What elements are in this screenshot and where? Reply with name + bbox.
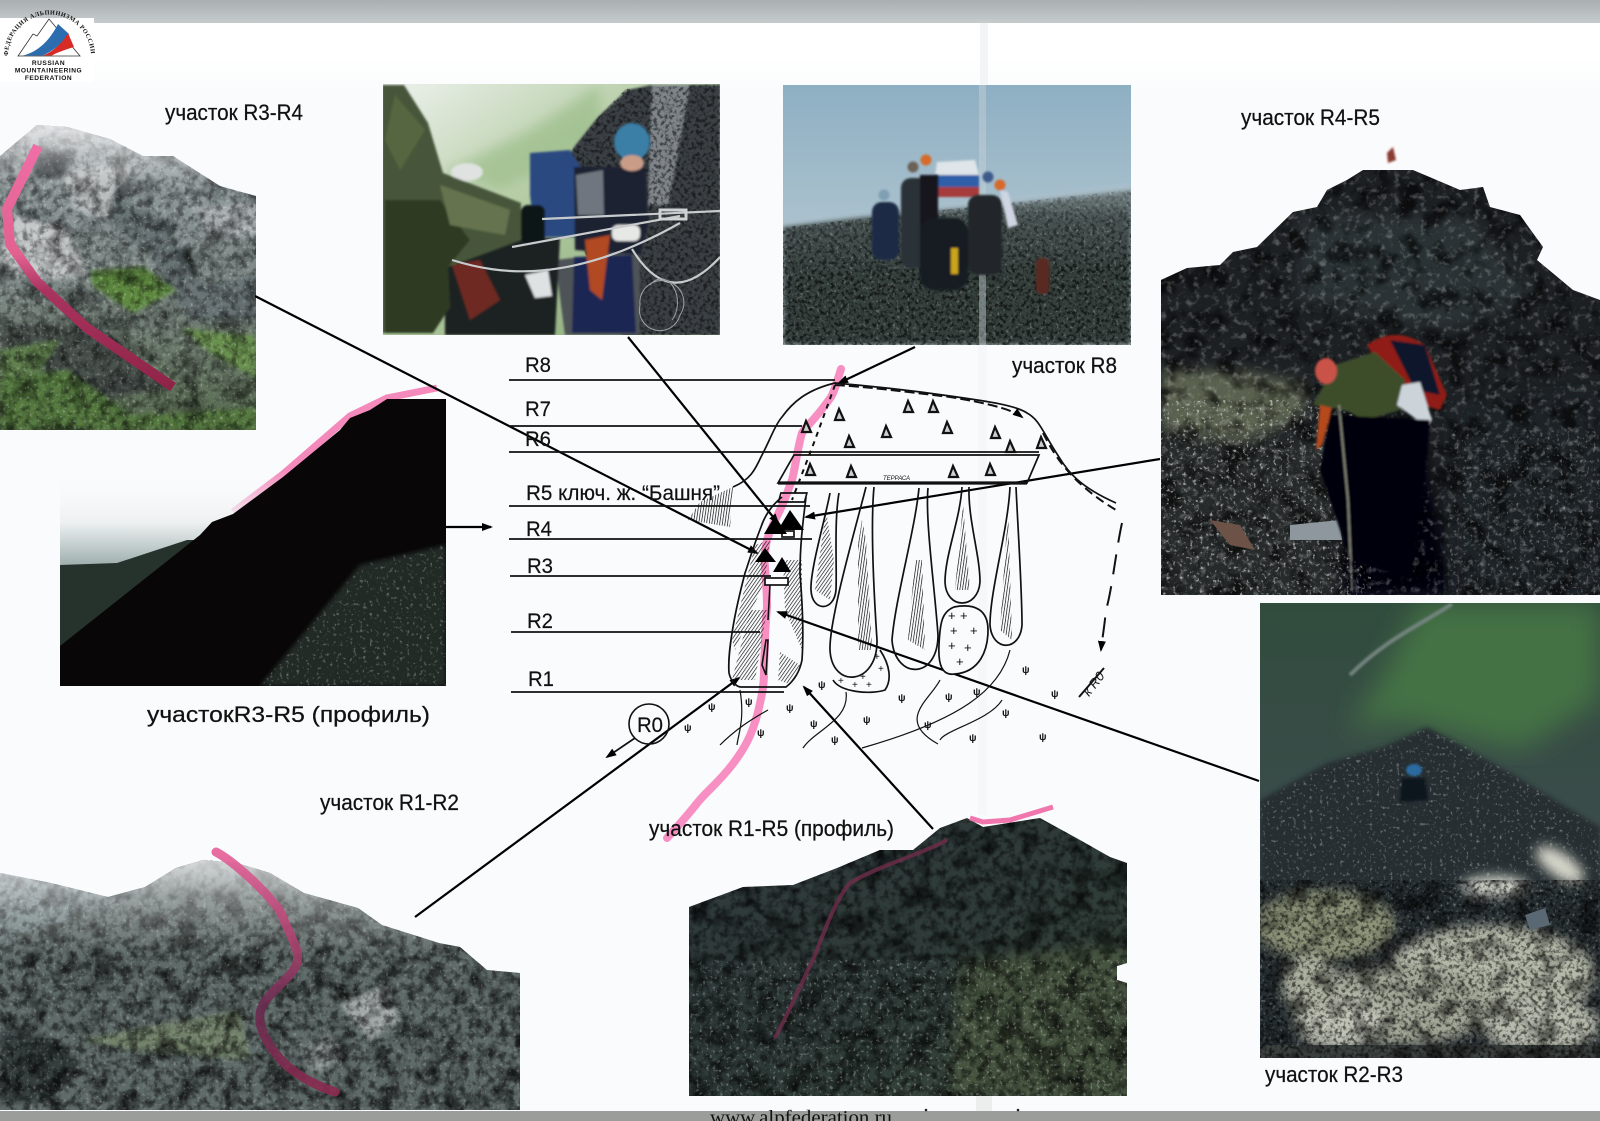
diagram connector lines xyxy=(255,296,1259,917)
photo: section R1-R2 xyxy=(0,850,520,1110)
start marker R0: R0 xyxy=(637,714,663,737)
couloir 2 xyxy=(830,487,877,677)
caption: R1-R5 profile: участок R1-R5 (профиль) xyxy=(649,816,894,841)
circular federation name: ФЕДЕРАЦИЯ АЛЬПИНИЗМА РОССИИ xyxy=(4,10,95,56)
arrow: photo R3-R4 to diagram xyxy=(255,296,757,553)
pink route on profile R3-R5 xyxy=(233,388,437,512)
reference point labels: R5 ключ. ж. “Башня” xyxy=(526,482,720,505)
grass marks: ψψψψψψψψψψψψψψψψψψ xyxy=(684,665,1059,746)
photo: section R2-R3 xyxy=(1255,603,1600,1058)
arrow: photo R1-R2 to diagram xyxy=(415,678,739,917)
climber in blue helmet xyxy=(1400,764,1428,802)
reference point labels: R6 xyxy=(525,428,551,451)
reference point labels xyxy=(525,354,720,691)
reference point labels: R4 xyxy=(526,518,552,541)
arrow: profile photo to diagram xyxy=(446,526,491,528)
mountain emblem xyxy=(18,19,80,56)
reference point labels: R8 xyxy=(525,354,551,377)
streams below the wall xyxy=(720,650,1010,748)
group of climbers xyxy=(872,154,1049,294)
caption: R4-R5: участок R4-R5 xyxy=(1241,105,1380,130)
climber on section R4-R5 xyxy=(1313,147,1447,590)
arrow: photo R2-R3 to diagram xyxy=(778,612,1259,781)
couloir 5 xyxy=(990,487,1022,645)
federation name in English: FEDERATION xyxy=(25,75,72,82)
terrace band xyxy=(778,455,1039,483)
lower moraine patch: ++++++ xyxy=(838,652,884,691)
photo: profile R3-R5 xyxy=(60,399,446,686)
fold specks xyxy=(925,1109,1019,1111)
massif outline xyxy=(733,383,1116,503)
plateau rocks xyxy=(802,401,1046,477)
arrow: climbers photo to diagram xyxy=(628,337,778,523)
caption: R3-R5 profile: участокR3-R5 (профиль) xyxy=(147,702,430,727)
route diagram sketch xyxy=(684,383,1122,748)
boulder patch with crosses: +++++++ xyxy=(948,608,978,669)
terrace label: ТЕРРАСА xyxy=(883,476,910,482)
reference point labels: R3 xyxy=(527,555,553,578)
caption: R3-R4: участок R3-R4 xyxy=(165,100,303,125)
central buttress xyxy=(729,493,807,687)
arrow: photo R8 to diagram xyxy=(839,347,915,383)
arrow toward R0 xyxy=(1079,668,1104,697)
white lichen patches xyxy=(1255,839,1600,1053)
couloir 4 xyxy=(945,487,980,603)
boulder patch with crosses xyxy=(939,606,988,674)
federation name in English xyxy=(15,60,82,82)
reference point labels: R7 xyxy=(525,398,551,421)
flag held by the team xyxy=(935,160,979,197)
start marker R0 xyxy=(607,704,669,757)
arrow: photo R4-R5 to diagram xyxy=(806,459,1160,517)
caption: R8: участок R8 xyxy=(1012,353,1117,378)
hatched wall near R5 xyxy=(688,487,733,527)
couloir 1 xyxy=(811,493,839,606)
reference lines R1 to R8 xyxy=(509,380,1039,692)
photo: team on summit R8 xyxy=(783,85,1131,345)
federation name in English: RUSSIAN xyxy=(32,60,65,67)
couloir 3 xyxy=(892,488,938,669)
descent route dashes xyxy=(792,385,1122,650)
photo: section R1-R5 profile xyxy=(689,815,1127,1096)
caption: R2-R3: участок R2-R3 xyxy=(1265,1062,1403,1087)
caption: R1-R2: участок R1-R2 xyxy=(320,790,459,815)
label toward R0: к R0 xyxy=(1080,668,1108,699)
reference point labels: R1 xyxy=(528,668,554,691)
reference point labels: R2 xyxy=(527,610,553,633)
arrow: photo R1-R5 to diagram xyxy=(804,687,933,829)
pink climbing route xyxy=(667,369,841,838)
federation name in English: MOUNTAINEERING xyxy=(15,68,82,74)
pink route on section R1-R2 xyxy=(216,852,335,1092)
photo: section R4-R5 xyxy=(1161,150,1600,595)
pink route on profile R1-R5 xyxy=(970,807,1053,822)
photo: climbers on rope xyxy=(382,84,720,335)
photo: section R3-R4 xyxy=(0,120,256,430)
logo: Russian Mountaineering Federation xyxy=(0,10,95,82)
